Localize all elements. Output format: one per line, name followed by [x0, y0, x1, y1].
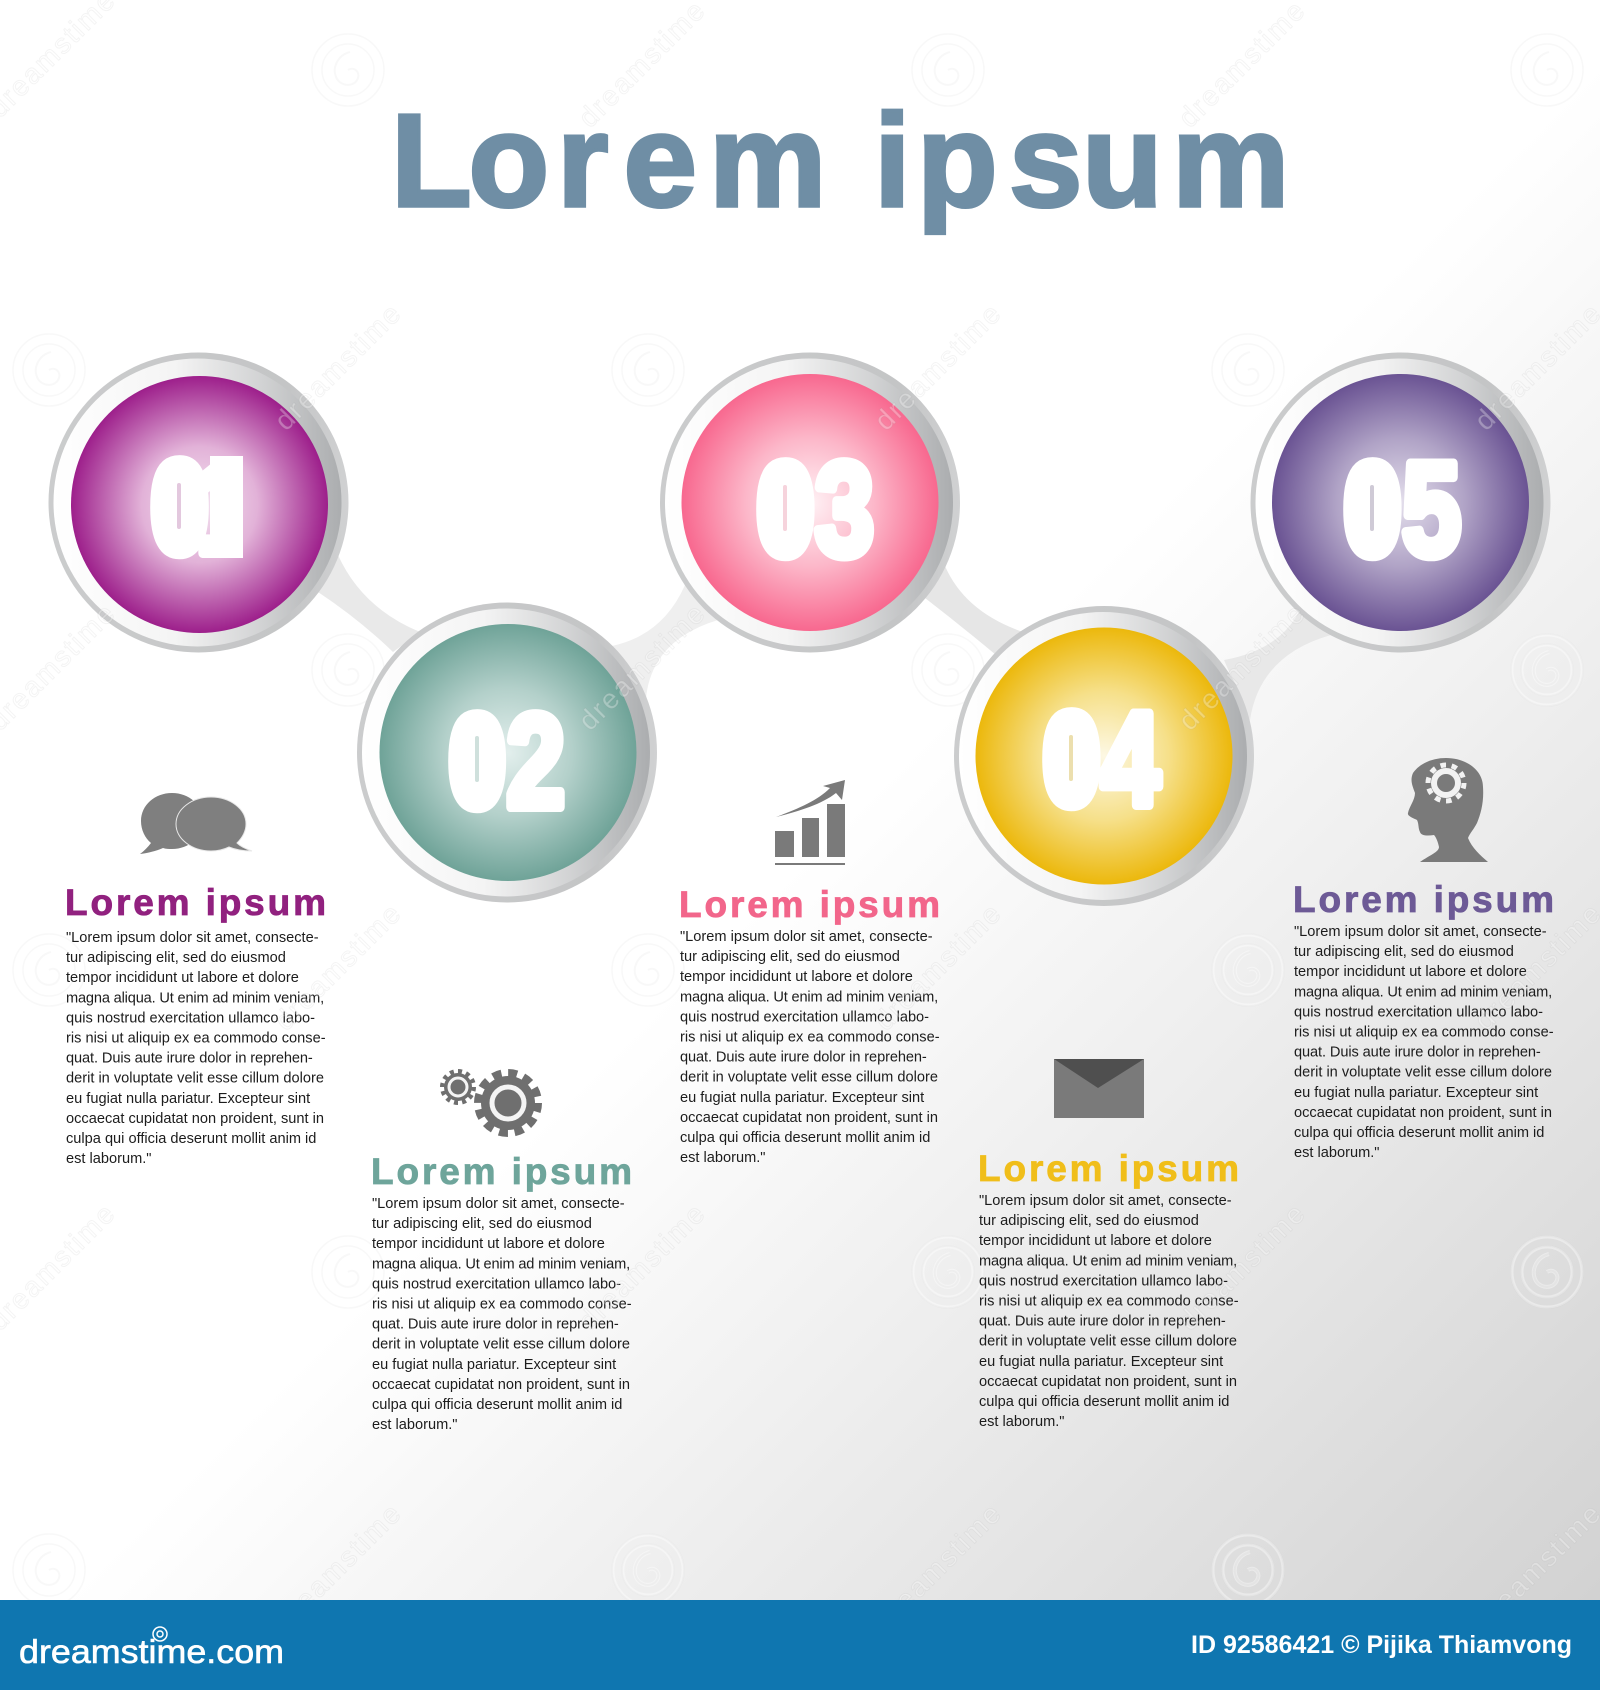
body text 01: tempor incididunt ut labore et dolore [66, 970, 299, 986]
icon: envelope [1054, 1059, 1144, 1118]
connector 2 to 3 [612, 585, 718, 698]
body text 02: est laborum." [372, 1417, 457, 1433]
body text 04: "Lorem ipsum dolor sit amet, consecte- [979, 1193, 1232, 1209]
watermark text: dreamstime [572, 597, 712, 736]
body text 02: magna aliqua. Ut enim ad minim veniam, [372, 1256, 630, 1272]
body text 01: occaecat cupidatat non proident, sunt in [66, 1111, 324, 1127]
body text 04: derit in voluptate velit esse cillum dolore [979, 1334, 1237, 1350]
body text 04: occaecat cupidatat non proident, sunt in [979, 1374, 1237, 1390]
body text 02: derit in voluptate velit esse cillum dolore [372, 1337, 630, 1353]
title: Lorem ipsum [391, 87, 1289, 234]
body text 03: quis nostrud exercitation ullamco labo- [680, 1009, 929, 1025]
body text 02: occaecat cupidatat non proident, sunt in [372, 1377, 630, 1393]
badge 03 [660, 352, 960, 652]
body text 03: derit in voluptate velit esse cillum dolore [680, 1070, 938, 1086]
body text 05: eu fugiat nulla pariatur. Excepteur sint [1294, 1085, 1538, 1101]
body text 05: est laborum." [1294, 1145, 1379, 1161]
watermark text: dreamstime [868, 897, 1008, 1036]
body text 01: tur adipiscing elit, sed do eiusmod [66, 950, 286, 966]
body text 02: eu fugiat nulla pariatur. Excepteur sint [372, 1357, 616, 1373]
body text 04: eu fugiat nulla pariatur. Excepteur sint [979, 1354, 1223, 1370]
badge 04: 04 [1042, 686, 1160, 834]
footer bar [0, 1600, 1600, 1690]
body text 03: tempor incididunt ut labore et dolore [680, 969, 913, 985]
panel: step 01 [48, 352, 348, 1167]
body text 04: magna aliqua. Ut enim ad minim veniam, [979, 1253, 1237, 1269]
watermark text: dreamstime [572, 1197, 712, 1336]
body text 04: tur adipiscing elit, sed do eiusmod [979, 1213, 1199, 1229]
badge 03: 03 [756, 436, 874, 584]
body text 05: tur adipiscing elit, sed do eiusmod [1294, 944, 1514, 960]
watermark text: dreamstime [268, 297, 408, 436]
heading 01: Lorem ipsum [65, 882, 326, 923]
body text 03: occaecat cupidatat non proident, sunt in [680, 1110, 938, 1126]
body text 04: quat. Duis aute irure dolor in reprehen- [979, 1314, 1226, 1330]
body text 05: culpa qui officia deserunt mollit anim id [1294, 1125, 1544, 1141]
body text 02: tur adipiscing elit, sed do eiusmod [372, 1216, 592, 1232]
body text 03: magna aliqua. Ut enim ad minim veniam, [680, 989, 938, 1005]
panel: step 02 [357, 602, 657, 1433]
body text 02: quat. Duis aute irure dolor in reprehen- [372, 1317, 619, 1333]
body text 05: derit in voluptate velit esse cillum dolore [1294, 1065, 1552, 1081]
body text 01: quis nostrud exercitation ullamco labo- [66, 1010, 315, 1026]
body text 01: ris nisi ut aliquip ex ea commodo conse- [66, 1030, 326, 1046]
body text 05: tempor incididunt ut labore et dolore [1294, 964, 1527, 980]
panel: step 04 [954, 606, 1254, 1430]
footer logo text: dreamstime.com [19, 1633, 284, 1670]
body text 01: quat. Duis aute irure dolor in reprehen- [66, 1051, 313, 1067]
icon: bar chart with arrow [775, 780, 845, 865]
badge 04 [954, 606, 1254, 906]
watermark text: dreamstime [1172, 1197, 1312, 1336]
body text 05: ris nisi ut aliquip ex ea commodo conse- [1294, 1024, 1554, 1040]
body text 05: "Lorem ipsum dolor sit amet, consecte- [1294, 924, 1547, 940]
body text 04: quis nostrud exercitation ullamco labo- [979, 1273, 1228, 1289]
body text 02: quis nostrud exercitation ullamco labo- [372, 1276, 621, 1292]
body text 03: quat. Duis aute irure dolor in reprehen- [680, 1050, 927, 1066]
connector 1 to 2 [318, 555, 420, 652]
body text 02: culpa qui officia deserunt mollit anim id [372, 1397, 622, 1413]
body text 01: eu fugiat nulla pariatur. Excepteur sint [66, 1091, 310, 1107]
icon: speech bubbles [140, 793, 252, 854]
footer logo spiral [153, 1627, 167, 1641]
body text 03: culpa qui officia deserunt mollit anim id [680, 1130, 930, 1146]
body text 03: ris nisi ut aliquip ex ea commodo conse- [680, 1030, 940, 1046]
icon: head with gear [1408, 758, 1488, 862]
body text 03: tur adipiscing elit, sed do eiusmod [680, 949, 900, 965]
footer credit: ID 92586421 © Pijika Thiamvong [1191, 1631, 1572, 1659]
connector 3 to 4 [925, 566, 1023, 655]
icon: gears [442, 1072, 538, 1133]
badge 05 [1250, 352, 1550, 652]
panel: step 03 [660, 352, 960, 1166]
body text 03: "Lorem ipsum dolor sit amet, consecte- [680, 929, 933, 945]
body text 05: magna aliqua. Ut enim ad minim veniam, [1294, 984, 1552, 1000]
body text 03: est laborum." [680, 1150, 765, 1166]
heading 02: Lorem ipsum [371, 1151, 632, 1192]
body text 02: ris nisi ut aliquip ex ea commodo conse- [372, 1296, 632, 1312]
body text 05: quat. Duis aute irure dolor in reprehen- [1294, 1045, 1541, 1061]
badge 02 [357, 602, 657, 902]
heading 05: Lorem ipsum [1293, 879, 1554, 920]
badge 01 [48, 352, 348, 652]
body text 02: tempor incididunt ut labore et dolore [372, 1236, 605, 1252]
heading 04: Lorem ipsum [978, 1148, 1239, 1189]
body text 01: est laborum." [66, 1151, 151, 1167]
watermark text: dreamstime [268, 897, 408, 1036]
body text 04: est laborum." [979, 1414, 1064, 1430]
body text 05: quis nostrud exercitation ullamco labo- [1294, 1004, 1543, 1020]
body text 03: eu fugiat nulla pariatur. Excepteur sint [680, 1090, 924, 1106]
body text 01: "Lorem ipsum dolor sit amet, consecte- [66, 930, 319, 946]
badge 01: 01 [150, 433, 255, 582]
body text 01: magna aliqua. Ut enim ad minim veniam, [66, 990, 324, 1006]
body text 01: derit in voluptate velit esse cillum dolore [66, 1071, 324, 1087]
body text 04: culpa qui officia deserunt mollit anim id [979, 1394, 1229, 1410]
panel: step 05 [1250, 352, 1554, 1161]
watermark text: dreamstime [268, 1497, 408, 1636]
body text 02: "Lorem ipsum dolor sit amet, consecte- [372, 1196, 625, 1212]
body text 04: tempor incididunt ut labore et dolore [979, 1233, 1212, 1249]
connector 4 to 5 [1224, 610, 1331, 720]
body text 04: ris nisi ut aliquip ex ea commodo conse- [979, 1294, 1239, 1310]
badge 02: 02 [448, 688, 565, 836]
watermark text: dreamstime [868, 297, 1008, 436]
badge 05: 05 [1343, 436, 1461, 584]
watermark text: dreamstime [1172, 597, 1312, 736]
watermark text: dreamstime [868, 1497, 1008, 1636]
body text 01: culpa qui officia deserunt mollit anim id [66, 1131, 316, 1147]
body text 05: occaecat cupidatat non proident, sunt in [1294, 1105, 1552, 1121]
heading 03: Lorem ipsum [679, 884, 940, 925]
